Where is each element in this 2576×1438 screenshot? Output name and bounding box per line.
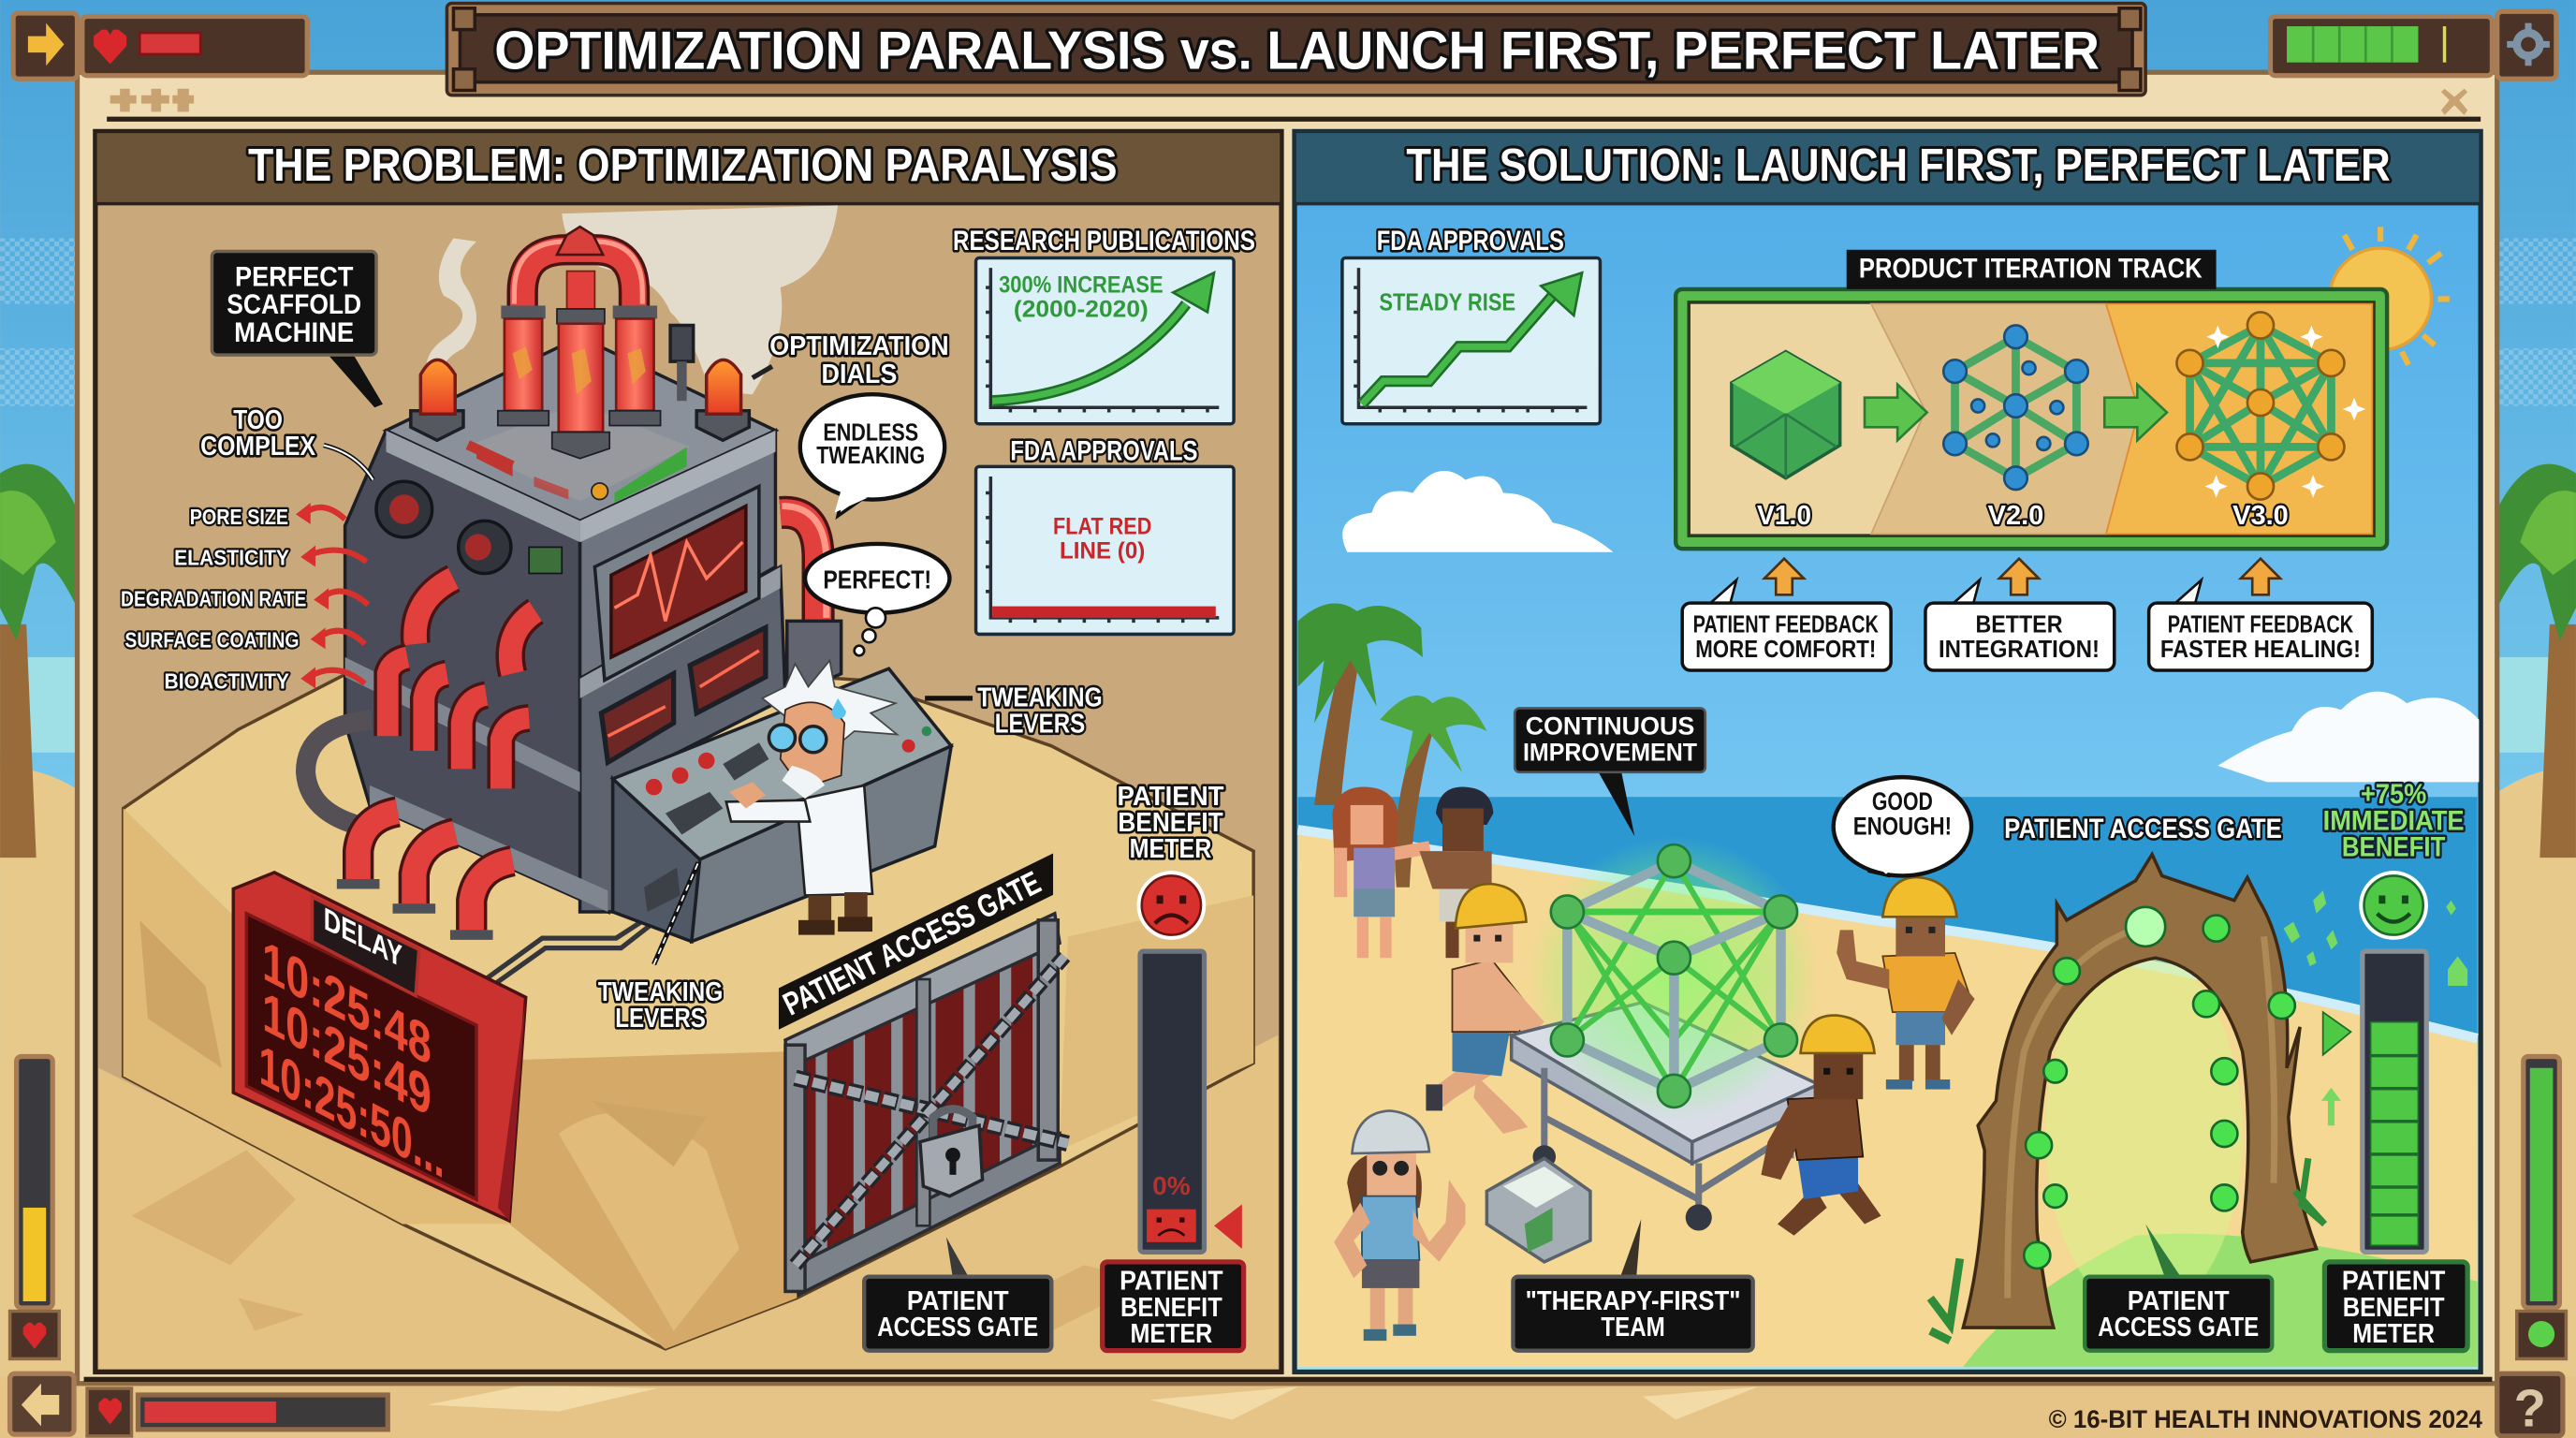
- patient benefit meter: full: [2284, 779, 2467, 1351]
- labels: scaffold parameters: SURFACE COATING: [124, 627, 299, 652]
- gate banner: PATIENT ACCESS GATE: [778, 865, 1046, 1022]
- title banner: [446, 4, 2145, 95]
- tweaking console: [613, 668, 951, 942]
- label: tweaking levers lower: [598, 862, 723, 1034]
- scientist: [726, 661, 897, 935]
- arrows: [1865, 385, 2167, 440]
- outer palm tree left: [0, 464, 78, 858]
- meter caption: METER: [1131, 1319, 1212, 1349]
- green ground: [1963, 1234, 2478, 1367]
- meter caption: METER: [2352, 1319, 2435, 1349]
- chart: research publications: RESEARCH PUBLICATIONS: [953, 226, 1255, 257]
- cables: [476, 920, 651, 992]
- label: optimization dials: OPTIMIZATION: [769, 331, 949, 361]
- status lights: [476, 447, 687, 503]
- chart: research publications: 300% INCREASE: [999, 272, 1164, 298]
- beach: [1298, 829, 2478, 1367]
- meter heading: PATIENT: [1117, 782, 1224, 812]
- panel: the problem: [95, 131, 1281, 1372]
- chart: FDA approvals flat: [976, 435, 1234, 634]
- smoke: [427, 205, 838, 394]
- feedback bubble 1: PATIENT FEEDBACK: [1693, 612, 1879, 638]
- feedback bubble 3: [2149, 580, 2372, 670]
- panel background: [1295, 131, 2481, 1372]
- meter pointer: [1214, 1204, 1242, 1249]
- worker front right: [1761, 1016, 1881, 1236]
- labels: scaffold parameters: [121, 505, 368, 693]
- meter heading: [2323, 779, 2465, 862]
- green sparkles: [2284, 890, 2467, 1125]
- chart: research publications: [953, 226, 1255, 424]
- gate caption: PATIENT: [907, 1286, 1009, 1316]
- meter bar: [2363, 951, 2426, 1252]
- title text: OPTIMIZATION PARALYSIS vs. LAUNCH FIRST, PERFECT LATER: [494, 22, 2100, 81]
- delay timer: [233, 873, 526, 1221]
- sad face: [1137, 871, 1206, 940]
- panel heading: [1295, 131, 2481, 204]
- label: too complex: TOO: [233, 405, 283, 435]
- version 1 cube: [1732, 352, 1840, 531]
- callout: continuous improvement: IMPROVEMENT: [1523, 738, 1697, 767]
- label: tweaking levers lower: LEVERS: [615, 1004, 706, 1034]
- meter caption: BENEFIT: [1120, 1293, 1222, 1323]
- label: tweaking levers lower: TWEAKING: [598, 977, 723, 1007]
- feedback bubble 1: MORE COMFORT!: [1695, 637, 1876, 663]
- smile face: [2359, 871, 2428, 940]
- worker with thumbs up: [1837, 877, 1975, 1090]
- meter heading: [1117, 782, 1224, 864]
- label: optimization dials: [753, 331, 949, 389]
- track heading: [1847, 250, 2217, 289]
- main monitor: [594, 486, 759, 681]
- thought bubble: perfect: PERFECT!: [823, 565, 931, 594]
- HUD: help button: ?: [2514, 1378, 2546, 1437]
- padlock: [920, 1109, 983, 1196]
- labels: scaffold parameters: BIOACTIVITY: [165, 668, 289, 693]
- meter heading: IMMEDIATE: [2323, 805, 2465, 836]
- red hoses on body: [388, 579, 535, 788]
- icon: gear: [2507, 23, 2550, 66]
- outer palm tree right: [2497, 464, 2576, 858]
- meter heading: BENEFIT: [2342, 831, 2445, 862]
- glowing scaffold on cart: [1512, 836, 1819, 1231]
- meter caption: PATIENT: [1120, 1267, 1223, 1297]
- speech bubble: good enough: ENOUGH!: [1853, 812, 1952, 841]
- chart: FDA approvals flat: LINE (0): [1060, 539, 1145, 565]
- equipment cart: [1486, 1158, 1590, 1262]
- small monitors: [601, 627, 766, 762]
- HUD: right vertical meter: [2517, 1056, 2566, 1358]
- callout: perfect scaffold machine: SCAFFOLD: [227, 289, 361, 320]
- panel heading: THE PROBLEM: OPTIMIZATION PARALYSIS: [248, 140, 1117, 191]
- delay tag: DELAY: [324, 901, 402, 975]
- meter heading: BENEFIT: [1118, 808, 1223, 838]
- HUD: top right energy and gear: [2271, 11, 2556, 79]
- track heading: PRODUCT ITERATION TRACK: [1859, 254, 2203, 285]
- meter pointer: [2323, 1012, 2351, 1055]
- green lights: [2024, 907, 2295, 1269]
- icon: sun: [2330, 227, 2450, 365]
- speech bubble: endless tweaking: ENDLESS: [823, 419, 918, 446]
- product iteration track: [1676, 250, 2387, 549]
- HUD: top left arrow and health: [13, 13, 307, 79]
- couple on beach: [1332, 787, 1493, 958]
- sand island: [98, 649, 1278, 1369]
- label: tweaking levers right: LEVERS: [995, 710, 1085, 740]
- label: tweaking levers right: TWEAKING: [977, 683, 1103, 713]
- icon: red arrows: [305, 507, 368, 683]
- speech bubble: good enough: [1834, 777, 1971, 875]
- feedback bubble 1: [1682, 580, 1891, 670]
- timer readouts: 10:25:49: [262, 979, 432, 1129]
- label: optimization dials: DIALS: [822, 360, 897, 389]
- panel background: [95, 131, 1281, 1372]
- icon: arrow heads: [296, 503, 329, 688]
- gate caption: PATIENT: [2128, 1286, 2230, 1316]
- feedback arrows: [1764, 559, 2280, 594]
- HUD: help button: [2497, 1373, 2563, 1437]
- version 2 lattice: [1943, 325, 2088, 531]
- small side tubes: [411, 325, 749, 440]
- panel: the solution: [1295, 131, 2481, 1372]
- worker pushing the cart: [1426, 884, 1544, 1134]
- meter caption: [1103, 1262, 1244, 1351]
- team member front left: [1334, 1110, 1466, 1341]
- chart: FDA approvals rising: [1342, 226, 1600, 424]
- team caption: "THERAPY-FIRST": [1526, 1286, 1741, 1316]
- meter heading: METER: [1130, 834, 1211, 864]
- feedback bubble 2: BETTER: [1975, 612, 2062, 638]
- callout: continuous improvement: [1515, 708, 1705, 836]
- panel heading: [95, 131, 1281, 204]
- chart: research publications: (2000-2020): [1014, 298, 1149, 323]
- team caption: [1513, 1219, 1753, 1351]
- label: tweaking levers right: [925, 683, 1103, 740]
- label: too complex: COMPLEX: [200, 432, 316, 462]
- gray side hose: [305, 720, 378, 829]
- speech bubble: endless tweaking: [800, 394, 944, 516]
- gate caption: [2085, 1224, 2272, 1351]
- speech bubble: good enough: GOOD: [1872, 786, 1933, 815]
- version 2 lattice: V2.0: [1988, 501, 2043, 531]
- floor pipes: [337, 812, 513, 940]
- gate caption: [864, 1238, 1051, 1351]
- timer readouts: 10:25:50...: [258, 1032, 445, 1191]
- callout: perfect scaffold machine: PERFECT: [235, 261, 353, 292]
- gate banner: [778, 856, 1051, 1027]
- feedback bubble 2: INTEGRATION!: [1939, 637, 2100, 663]
- right pipe: [781, 506, 842, 690]
- meter caption: BENEFIT: [2343, 1293, 2445, 1323]
- chains: [795, 956, 1068, 1265]
- patient benefit meter: empty: [1103, 782, 1244, 1351]
- gate caption: ACCESS GATE: [877, 1313, 1038, 1343]
- meter caption: PATIENT: [2342, 1267, 2446, 1297]
- gate caption: ACCESS GATE: [2098, 1313, 2259, 1343]
- labels: scaffold parameters: PORE SIZE: [190, 505, 288, 529]
- palm trees: [1298, 603, 1486, 888]
- patient access gate: open arch: [1930, 855, 2324, 1341]
- HUD: left vertical meter: [10, 1056, 59, 1358]
- labels: scaffold parameters: DEGRADATION RATE: [121, 587, 306, 611]
- label: too complex: [200, 405, 373, 479]
- callout: perfect scaffold machine: MACHINE: [234, 317, 354, 348]
- version 3 lattice: [2176, 312, 2365, 531]
- label: patient access gate: PATIENT ACCESS GATE: [2004, 814, 2282, 844]
- optimization dials: [376, 481, 562, 574]
- speech bubble: endless tweaking: TWEAKING: [816, 443, 925, 469]
- feedback bubble 3: FASTER HEALING!: [2160, 637, 2361, 663]
- chart: FDA approvals flat: FLAT RED: [1053, 514, 1151, 539]
- clouds: [1342, 471, 2479, 782]
- cart: [1512, 1003, 1819, 1231]
- meter bar: [1140, 951, 1204, 1252]
- feedback bubble 2: [1925, 580, 2115, 670]
- machine body: [345, 337, 785, 912]
- patient access gate: locked: [778, 856, 1068, 1295]
- meter caption: [2324, 1262, 2467, 1351]
- ocean: [1298, 797, 2478, 1038]
- callout: perfect scaffold machine: [212, 252, 383, 407]
- chart: FDA approvals flat: FDA APPROVALS: [1010, 435, 1197, 466]
- timer readouts: [258, 928, 445, 1191]
- meter bar: 0%: [1152, 1171, 1191, 1200]
- large glass tubes: [498, 227, 661, 459]
- machine: perfect scaffold machine: [305, 227, 842, 992]
- timer readouts: 10:25:48: [262, 928, 432, 1078]
- version 1 cube: V1.0: [1757, 501, 1811, 531]
- chart: FDA approvals rising: FDA APPROVALS: [1377, 226, 1564, 257]
- HUD: bottom left back arrow and health bar: [10, 1373, 388, 1436]
- thought bubble: perfect: [805, 544, 949, 655]
- copyright: © 16-BIT HEALTH INNOVATIONS 2024: [2049, 1404, 2482, 1433]
- team caption: TEAM: [1601, 1313, 1665, 1343]
- panel heading: THE SOLUTION: LAUNCH FIRST, PERFECT LATER: [1406, 140, 2391, 191]
- callout: continuous improvement: CONTINUOUS: [1526, 711, 1694, 740]
- version 3 lattice: V3.0: [2232, 501, 2289, 531]
- meter heading: +75%: [2361, 779, 2426, 810]
- labels: scaffold parameters: ELASTICITY: [174, 546, 289, 570]
- feedback bubble 3: PATIENT FEEDBACK: [2168, 612, 2354, 638]
- chart: FDA approvals rising: STEADY RISE: [1379, 290, 1515, 316]
